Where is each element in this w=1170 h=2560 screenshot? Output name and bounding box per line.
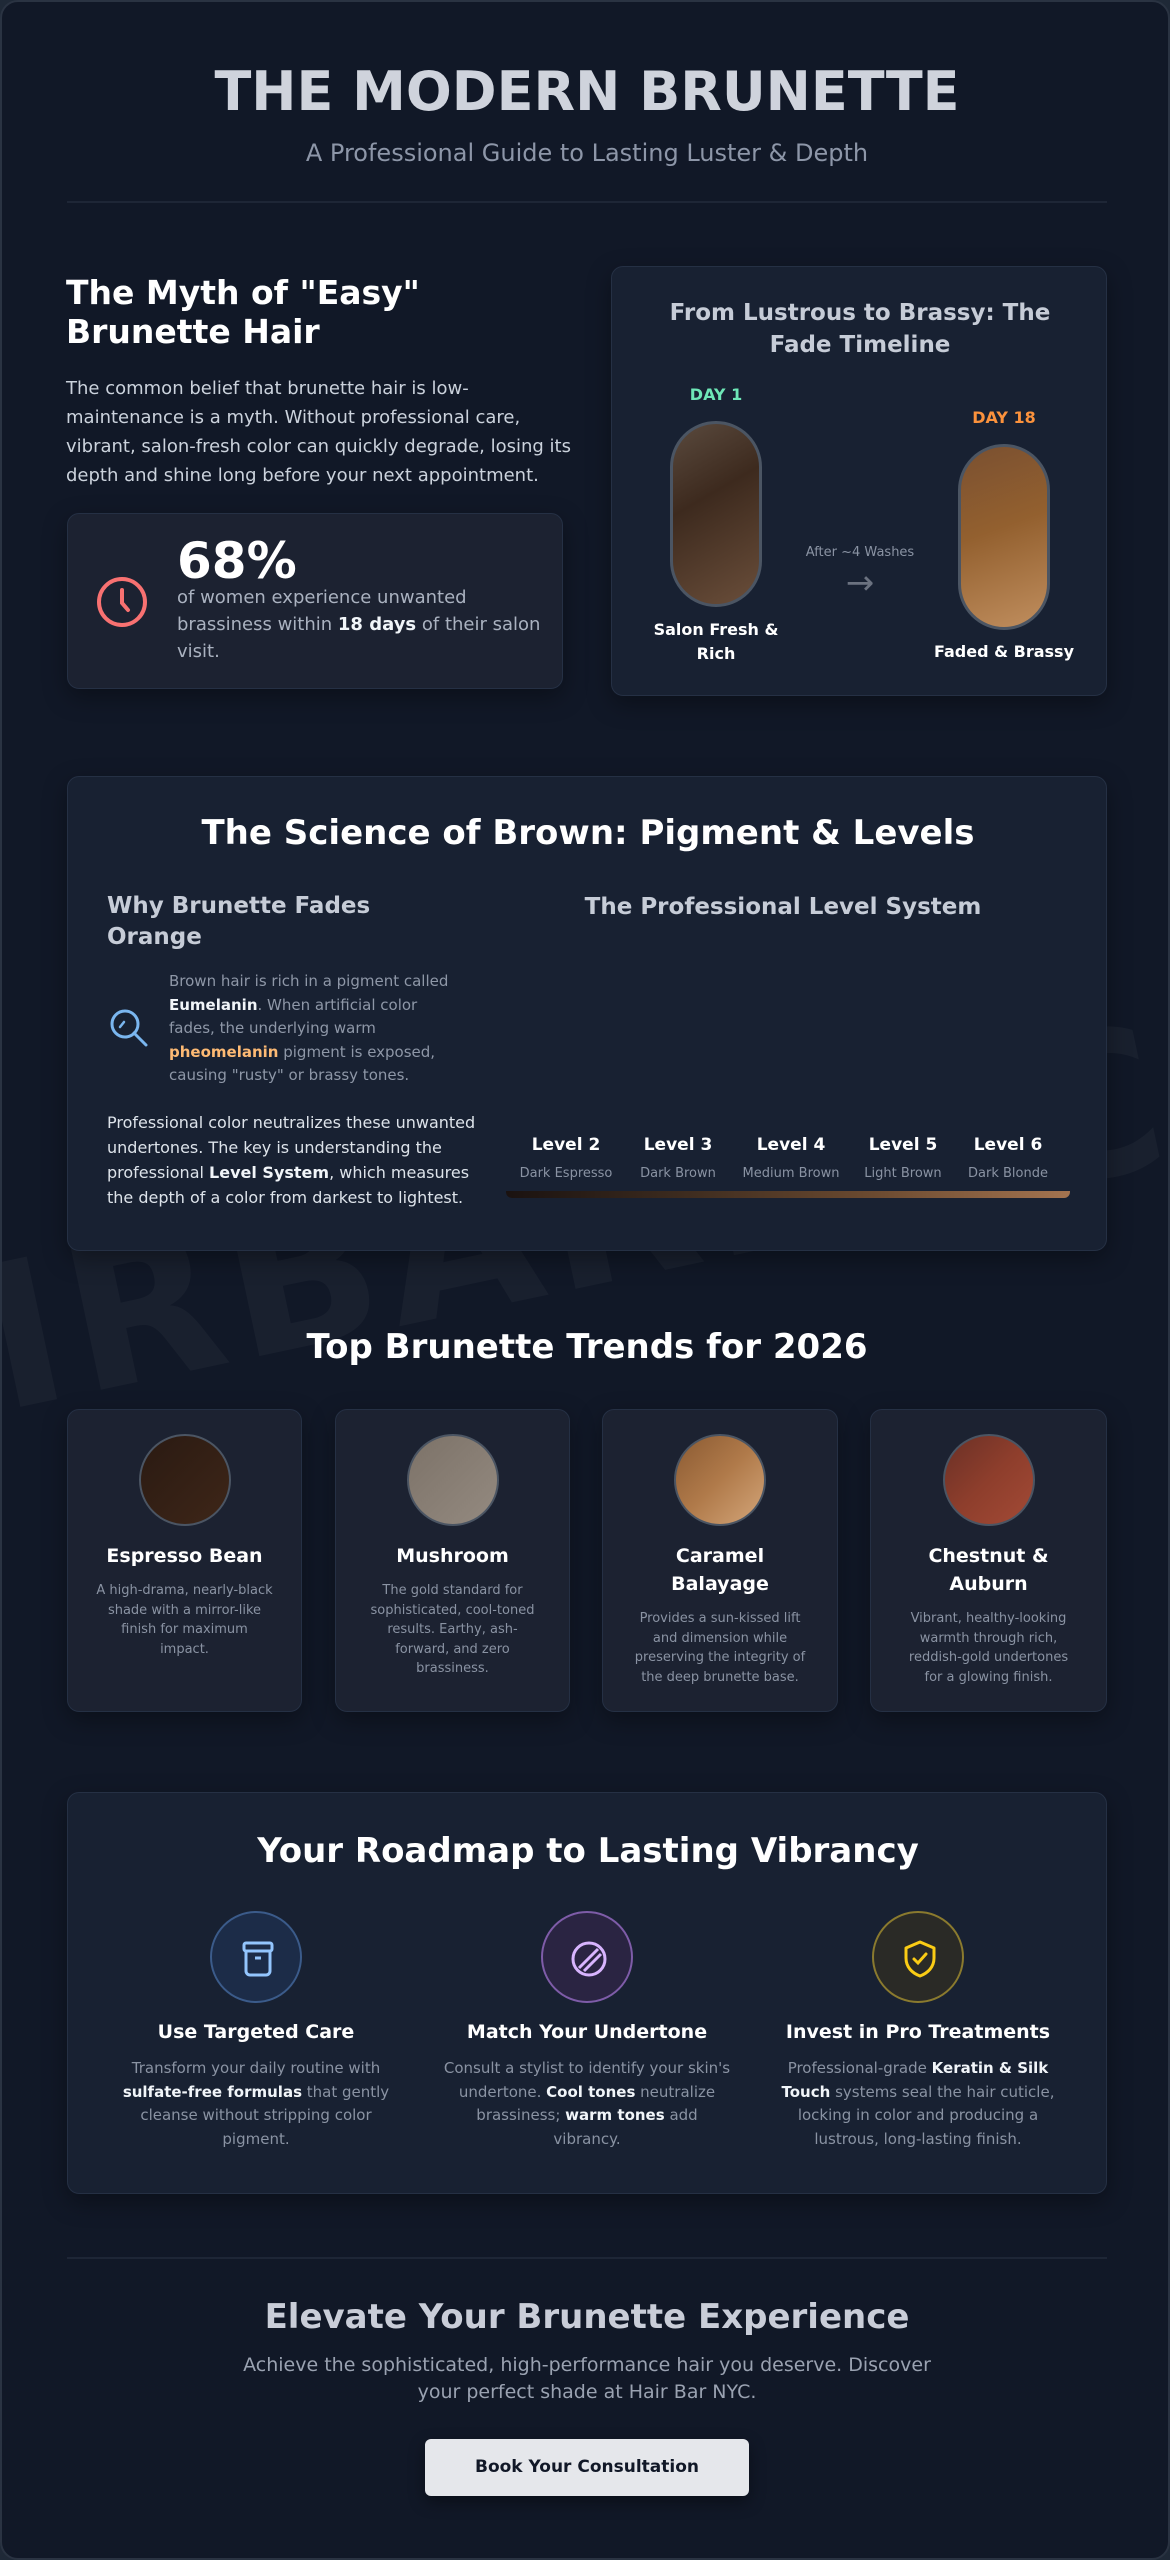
panel: trend mushroom [335, 1409, 570, 1712]
panel: trend chestnut: Vibrant, healthy-looking [911, 1611, 1066, 1626]
arrow: after washes [806, 545, 914, 603]
text: myth paragraph: vibrant, salon-fresh color can quickly degrade, losing its [66, 436, 571, 457]
panel: trend espresso: impact. [160, 1642, 209, 1656]
arrow: after washes: After ~4 Washes [806, 545, 914, 560]
subtitle: A Professional Guide to Lasting Luster & Depth [306, 139, 868, 167]
panel: science [67, 776, 1107, 1251]
step: pro treatments: lustrous, long-lasting finish. [814, 2130, 1022, 2148]
stat box [67, 513, 563, 689]
heading: The Science of Brown: Pigment & Levels [201, 813, 974, 853]
chart: level scale [506, 1135, 1070, 1198]
button: book: Book Your Consultation [475, 2457, 699, 2477]
heading: elevate: Elevate Your Brunette Experience [265, 2297, 909, 2337]
panel: trend mushroom: brassiness. [416, 1661, 489, 1676]
panel: trend caramel: Provides a sun-kissed lift [640, 1611, 800, 1626]
swatch: fresh [670, 421, 762, 607]
panel: trend caramel: preserving the integrity of [635, 1650, 805, 1665]
chart: level scale: Dark Espresso [520, 1166, 612, 1181]
step: undertone [444, 1911, 730, 2148]
panel: trend caramel: Caramel [676, 1545, 764, 1567]
step: undertone: brassiness; warm tones add [476, 2106, 698, 2124]
text: myth paragraph: The common belief that brunette hair is low- [66, 378, 469, 399]
icon: palette [541, 1911, 633, 2003]
panel: fade timeline [611, 266, 1107, 696]
step: targeted care: sulfate-free formulas that gently [123, 2082, 389, 2100]
subheading: why fades: Why Brunette Fades Orange [107, 893, 370, 950]
step: undertone: Match Your Undertone [467, 2021, 707, 2043]
heading: myth: The Myth of "Easy" Brunette Hair [66, 273, 420, 351]
heading: trends: Top Brunette Trends for 2026 [306, 1327, 868, 1367]
text: cta: Achieve the sophisticated, high-performance hair you deserve. Discover your perfect shade at Hair Bar NYC. [243, 2354, 931, 2403]
title: THE MODERN BRUNETTE [214, 60, 960, 123]
step: pro treatments: locking in color and producing a [798, 2106, 1038, 2124]
chart: level scale: Light Brown [864, 1166, 942, 1181]
chart: level scale: Medium Brown [743, 1166, 839, 1181]
step: pro treatments: Professional-grade Keratin & Silk [788, 2059, 1048, 2077]
label: day 18: DAY 18 [972, 408, 1036, 427]
step: pro treatments: Touch systems seal the hair cuticle, [782, 2082, 1054, 2100]
panel: trend mushroom: forward, and zero [395, 1642, 510, 1656]
step: undertone: vibrancy. [553, 2130, 621, 2148]
label: salon fresh: Salon Fresh & Rich [654, 620, 778, 663]
panel: trend espresso: Espresso Bean [106, 1545, 263, 1567]
chart: level scale: Level 4 [757, 1135, 825, 1155]
text: myth paragraph: maintenance is a myth. Without professional care, [66, 407, 520, 428]
chart: level scale: Level 5 [869, 1135, 937, 1155]
step: targeted care [123, 1911, 389, 2148]
panel: trend mushroom: results. Earthy, ash- [387, 1622, 518, 1637]
text: myth paragraph [66, 378, 571, 486]
swatch: brassy [958, 444, 1050, 630]
step: targeted care: pigment. [222, 2130, 290, 2148]
panel: trend chestnut: reddish-gold undertones [909, 1650, 1068, 1665]
panel: trend chestnut: Auburn [949, 1573, 1028, 1595]
panel: trend chestnut: for a glowing finish. [924, 1670, 1052, 1684]
button: book [425, 2439, 749, 2496]
panel: trend espresso [67, 1409, 302, 1712]
panel: trend mushroom: The gold standard for [382, 1583, 523, 1598]
chart: level scale: Dark Blonde [968, 1166, 1048, 1181]
stat number: 68% [177, 532, 297, 590]
chart: level scale: Level 6 [974, 1135, 1042, 1155]
panel: trend mushroom: sophisticated, cool-toned [371, 1602, 534, 1618]
step: undertone: undertone. Cool tones neutralize [459, 2082, 715, 2100]
panel: trend caramel [602, 1409, 838, 1712]
chart: level scale: Dark Brown [640, 1166, 716, 1181]
panel: trend espresso: A high-drama, nearly-black [96, 1583, 273, 1598]
panel: trend mushroom: Mushroom [396, 1545, 509, 1567]
heading: From Lustrous to Brassy: The Fade Timeline [670, 300, 1050, 358]
icon: magnifier [110, 1010, 148, 1047]
panel: trend espresso: finish for maximum [121, 1622, 248, 1637]
icon: jar [210, 1911, 302, 2003]
icon: clock [97, 577, 147, 627]
text: myth paragraph: depth and shine long before your next appointment. [66, 465, 539, 486]
step: targeted care: cleanse without stripping color [140, 2106, 372, 2124]
chart: level scale: Level 2 [532, 1135, 600, 1155]
panel: trend chestnut [870, 1409, 1107, 1712]
text: pigment: Brown hair is rich in a pigment called Eumelanin. When artificial color fades, the underlying warm pheomelanin pigment is exposed, causing "rusty" or brassy tones. [169, 972, 448, 1084]
step: targeted care: Use Targeted Care [158, 2021, 354, 2043]
step: pro treatments [782, 1911, 1054, 2148]
heading: Your Roadmap to Lasting Vibrancy [257, 1831, 919, 1871]
chart: level scale: Level 3 [644, 1135, 712, 1155]
stat text: of women experience unwanted brassiness within 18 days of their salon visit. [177, 587, 540, 662]
subheading: level system: The Professional Level System [585, 894, 981, 920]
panel: trend caramel: the deep brunette base. [641, 1670, 799, 1684]
panel: trend caramel: and dimension while [653, 1630, 787, 1646]
step: targeted care: Transform your daily routine with [132, 2059, 380, 2077]
step: pro treatments: Invest in Pro Treatments [786, 2021, 1050, 2043]
panel: trend chestnut: Chestnut & [928, 1545, 1049, 1567]
panel: roadmap [67, 1792, 1107, 2194]
text: level system: Professional color neutralizes these unwanted undertones. The key is understanding the professional Level System, which measures the depth of a color from darkest to lightest. [107, 1113, 475, 1207]
arrow: after washes: → [846, 563, 874, 603]
label: day 1: DAY 1 [690, 385, 742, 404]
panel: trend espresso: shade with a mirror-like [108, 1602, 261, 1618]
icon: shield [872, 1911, 964, 2003]
panel: trend chestnut: warmth through rich, [920, 1630, 1057, 1646]
step: undertone: Consult a stylist to identify your skin's [444, 2059, 730, 2077]
panel: trend caramel: Balayage [671, 1573, 769, 1595]
label: faded: Faded & Brassy [934, 642, 1074, 661]
